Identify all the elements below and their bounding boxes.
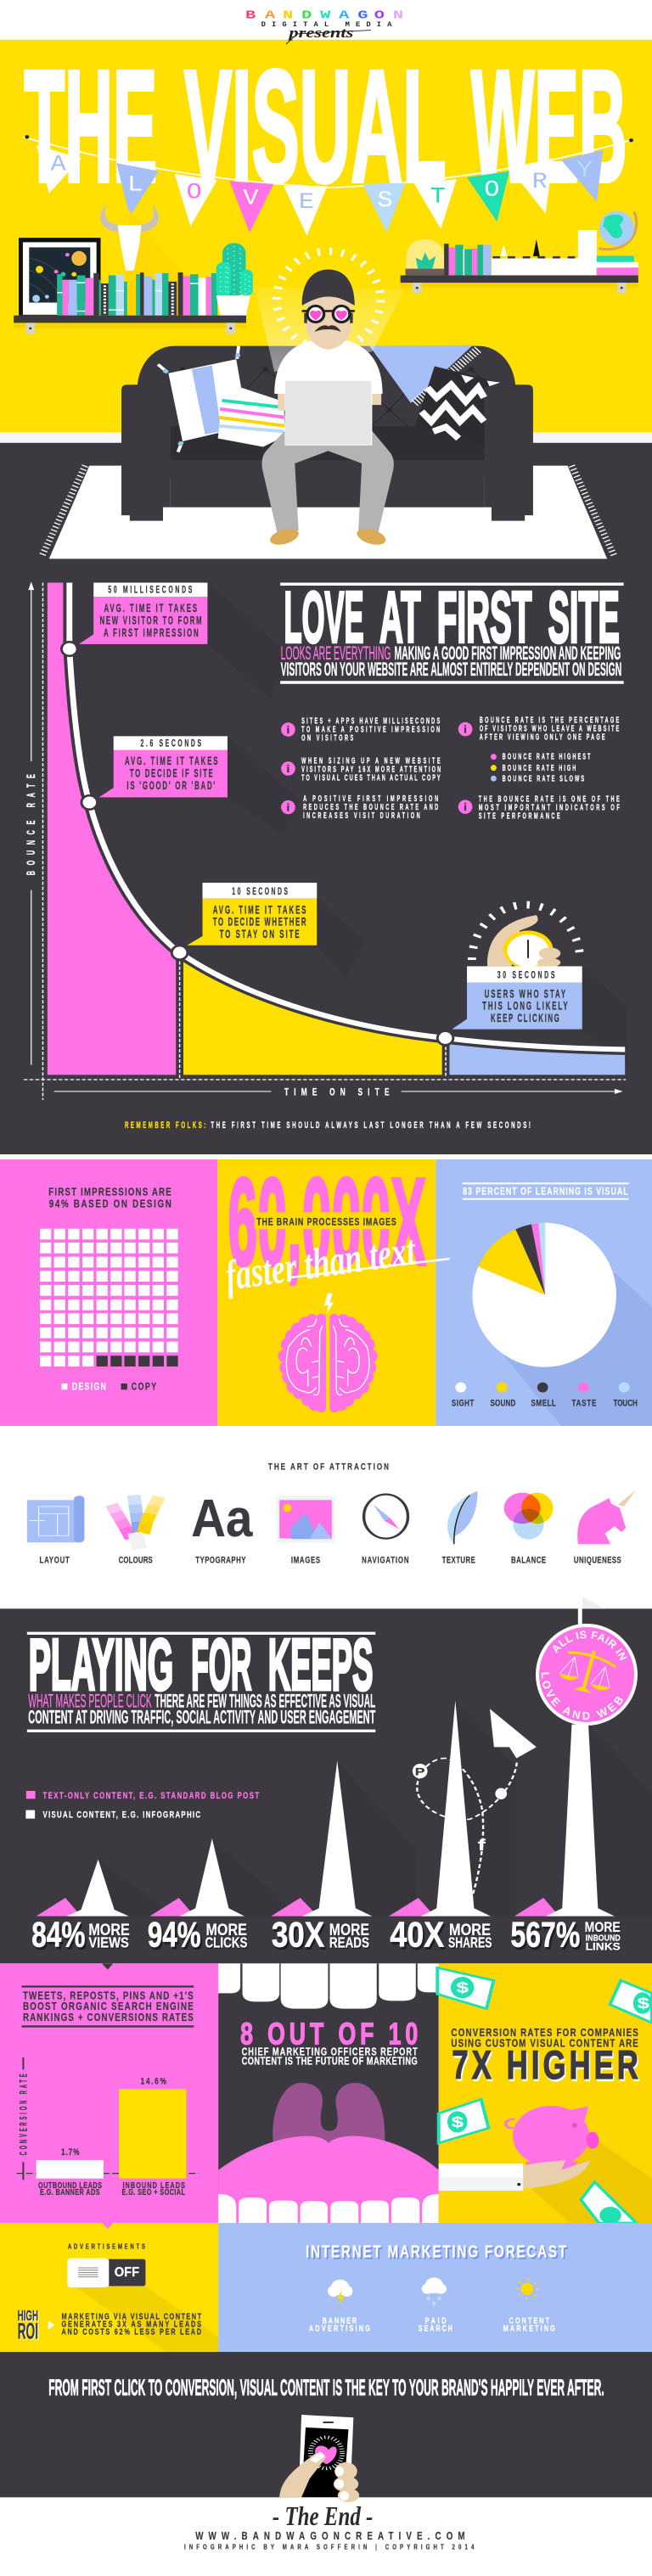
callout: 50 milliseconds: NEW VISITOR TO FORM	[100, 615, 202, 627]
legend: senses: TASTE	[571, 1398, 597, 1409]
heading: playing for keeps: WHAT MAKES PEOPLE CLICK	[28, 1691, 152, 1711]
info icons: i	[287, 724, 289, 736]
bunting: A Love Story: O	[484, 177, 500, 203]
text: info notes: INCREASES VISIT DURATION	[303, 811, 420, 821]
man on sofa	[261, 269, 394, 547]
legend: design vs copy	[61, 1381, 156, 1393]
stat: 30x more reads: READS	[330, 1935, 370, 1952]
icon: balance circles	[504, 1493, 553, 1540]
icon: bolt	[324, 1293, 334, 1313]
legend: senses: SMELL	[531, 1398, 556, 1409]
pie chart	[472, 1223, 616, 1367]
panel: internet marketing forecast: INTERNET MARKETING FORECAST	[306, 2242, 566, 2261]
toggle off: OFF	[115, 2265, 139, 2280]
labels: art of attraction: COLOURS	[119, 1556, 153, 1565]
panel: 7x higher: 7X HIGHER	[453, 2045, 639, 2090]
bar: inbound leads	[119, 2089, 186, 2179]
zigzag pillow	[414, 367, 500, 445]
stat: 30x more reads: READS	[329, 1933, 369, 1950]
badge: all is fair in love and web: ALL IS FAIR IN	[553, 1631, 627, 1661]
footer: the end and credits	[184, 2500, 475, 2551]
stat: 84% more views: MORE	[88, 1921, 130, 1939]
icon: globe	[599, 211, 637, 250]
panel: internet marketing forecast	[218, 2223, 652, 2352]
icon: dollar bills: $	[457, 1979, 469, 1996]
heading: love at first site: AT	[379, 577, 421, 658]
throw and pillows	[158, 345, 500, 452]
callout: 30 seconds: USERS WHO STAY	[485, 988, 565, 1001]
stat: 94% more clicks: 94%	[148, 1916, 201, 1955]
section: closing panels	[0, 2223, 652, 2551]
icon: paper plane	[490, 1709, 537, 1759]
text: high ROI: ROI	[18, 2319, 38, 2344]
callout: 30 seconds: KEEP CLICKING	[491, 1013, 559, 1025]
logo: Bandwagon Digital Media presents: B	[245, 9, 256, 22]
stat: 30x more reads: 30X	[272, 1916, 324, 1955]
icon: brain	[278, 1293, 378, 1412]
labels: art of attraction	[40, 1556, 621, 1565]
panel: 60,000x faster	[217, 1153, 436, 1426]
icon: dollar bills: $	[638, 1995, 649, 2012]
icon: dollar bills	[437, 1967, 652, 2224]
heading: playing for keeps: FOR	[191, 1624, 251, 1705]
legend: content types: TEXT-ONLY CONTENT, E.G. STANDARD BLOG POST	[42, 1791, 259, 1800]
panel: internet marketing forecast: ADVERTISING	[309, 2324, 370, 2333]
legend: bounce rate	[491, 752, 591, 783]
stat: 567% more inbound links: MORE	[586, 1921, 621, 1936]
panel: 7x higher: 7X HIGHER	[452, 2043, 638, 2087]
text: high ROI: HIGH	[18, 2307, 38, 2324]
panel: internet marketing forecast: SEARCH	[419, 2324, 452, 2333]
icon: piggy bank in hand	[439, 2106, 599, 2191]
panel: internet marketing forecast: BANNER	[323, 2316, 357, 2326]
panel: ads off and high ROI: GENERATES 3X AS MANY LEADS	[61, 2319, 201, 2329]
callout: 10 seconds: AVG. TIME IT TAKES	[213, 904, 306, 917]
panel: 7x higher: USING CUSTOM VISUAL CONTENT ARE	[451, 2037, 638, 2050]
footer: the end and credits: - The End -	[273, 2500, 373, 2531]
stat: 94% more clicks: MORE	[206, 1922, 248, 1940]
panel: mouth 8 out of 10: CONTENT IS THE FUTURE OF MARKETING	[242, 2056, 418, 2068]
footer: the end and credits: WWW.BANDWAGONCREATIVE.COM	[195, 2530, 465, 2542]
callout: 50 milliseconds: AVG. TIME IT TAKES	[104, 603, 198, 615]
stat: 40x more shares: 40X	[391, 1918, 446, 1957]
panel: ads off and high ROI: AND COSTS 62% LESS PER LEAD	[61, 2326, 201, 2337]
legend: design vs copy: DESIGN	[72, 1381, 106, 1393]
icon: phone with heart in hand	[279, 2415, 359, 2502]
icon: rain cloud	[422, 2277, 447, 2306]
icon: hand with stopwatch	[472, 905, 580, 968]
text: info notes: TO VISUAL CUES THAN ACTUAL COPY	[301, 773, 441, 783]
icon: scales	[559, 1651, 615, 1693]
legend: bounce rate: BOUNCE RATE SLOWS	[503, 774, 585, 783]
icon: layout blueprint	[27, 1496, 84, 1542]
labels: art of attraction: BALANCE	[511, 1556, 546, 1565]
callout: 30 seconds: THIS LONG LIKELY	[482, 1001, 568, 1013]
panel: mouth 8 out of 10: 8 OUT OF 10	[240, 2016, 418, 2051]
shirt	[274, 340, 383, 446]
callout: 10 seconds: TO DECIDE WHETHER	[213, 917, 306, 929]
bunting: A Love Story	[23, 135, 633, 236]
labels: art of attraction: NAVIGATION	[362, 1556, 409, 1565]
legend: content types: VISUAL CONTENT, E.G. INFOGRAPHIC	[42, 1810, 200, 1820]
panel: internet marketing forecast: CONTENT	[509, 2316, 550, 2326]
books	[57, 272, 217, 316]
bunting: A Love Story: E	[299, 189, 314, 215]
sofa	[121, 346, 533, 521]
labels: art of attraction: TYPOGRAPHY	[195, 1556, 246, 1565]
callout shadows	[207, 583, 628, 1067]
stat: 84% more views: 84%	[33, 1918, 87, 1957]
halo rays	[277, 251, 380, 349]
panel: 7x higher	[437, 1963, 652, 2224]
panel: conversion rate chart: OUTBOUND LEADS	[38, 2180, 102, 2190]
icon: cactus	[216, 243, 253, 316]
labels: art of attraction: LAYOUT	[40, 1556, 70, 1565]
labels: art of attraction: TEXTURE	[442, 1556, 475, 1565]
info icons: i	[464, 801, 467, 813]
callout: 10 seconds: TO STAY ON SITE	[220, 929, 300, 941]
heading: playing for keeps: PLAYING	[29, 1624, 173, 1705]
heading: the art of attraction: THE ART OF ATTRACTION	[268, 1462, 389, 1473]
shelf	[14, 316, 246, 334]
panel: ads off and high ROI	[0, 2223, 218, 2352]
bunting: A Love Story: T	[430, 183, 446, 210]
info icons: i	[287, 801, 289, 813]
heading: playing for keeps	[27, 1624, 375, 1732]
brain right hemisphere	[329, 1314, 378, 1412]
text: info notes: WHEN SIZING UP A NEW WEBSITE	[301, 756, 441, 766]
panel: 83 percent visual learning	[436, 1159, 652, 1426]
text: info notes: ON VISITORS	[301, 733, 354, 743]
legend: senses: SOUND	[490, 1398, 515, 1409]
badge: all is fair in love and web	[536, 1624, 638, 1726]
lower teeth	[218, 2194, 439, 2223]
bunting: A Love Story: Y	[577, 157, 593, 183]
logo: Bandwagon Digital Media presents: DIGITAL MEDIA	[261, 22, 391, 29]
icon: storm cloud	[328, 2280, 352, 2306]
stat: 567% more inbound links: INBOUND	[586, 1933, 621, 1943]
panel: conversion rate chart: E.G. SEO + SOCIAL	[122, 2187, 185, 2197]
toggle off	[67, 2259, 145, 2287]
panel: conversion rate chart: INBOUND LEADS	[122, 2180, 185, 2190]
callout: 10 seconds: 10 SECONDS	[232, 886, 288, 898]
icon: images	[277, 1496, 334, 1542]
callout: 50 milliseconds: A FIRST IMPRESSION	[104, 627, 199, 640]
stat: 40x more shares: MORE	[450, 1922, 492, 1940]
stat: 40x more shares: MORE	[449, 1921, 491, 1939]
legs	[261, 430, 394, 533]
icon: colour swatches	[111, 1496, 160, 1549]
panel: mouth 8 out of 10	[218, 1963, 439, 2223]
stat: 30x more reads: 30X	[273, 1918, 326, 1957]
logo: Bandwagon Digital Media presents: N	[283, 9, 293, 22]
section: playing for keeps: SHARES	[449, 1935, 492, 1952]
section: playing for keeps	[0, 1596, 652, 1963]
laptop glow	[255, 287, 405, 372]
wall	[0, 40, 652, 433]
panel: conversion rate chart	[0, 1963, 218, 2223]
heading: love at first site	[280, 577, 624, 684]
text: info notes: SITES + APPS HAVE MILLISECONDS	[301, 716, 441, 726]
logo: Bandwagon Digital Media presents: D	[301, 9, 312, 22]
axes: BOUNCE RATE	[25, 774, 38, 875]
badge: all is fair in love and web: LOVE AND WEB	[542, 1672, 623, 1720]
stat: 84% more views: MORE	[89, 1922, 131, 1940]
section: conversion panels	[0, 1963, 652, 2224]
legend: senses: TOUCH	[613, 1398, 638, 1409]
section: playing for keeps: KEEPS	[268, 1624, 373, 1705]
labels: art of attraction: UNIQUENESS	[574, 1556, 621, 1565]
panel: ads off and high ROI: ADVERTISEMENTS	[68, 2242, 145, 2251]
legend: senses	[452, 1383, 638, 1409]
bunting: A Love Story: V	[243, 185, 259, 211]
stat: 94% more clicks: CLICKS	[205, 1933, 247, 1950]
icon: texture feather	[447, 1491, 477, 1544]
stat: 94% more clicks: CLICKS	[205, 1935, 248, 1952]
logo: Bandwagon Digital Media presents: presents	[287, 25, 354, 41]
text: high ROI: HIGH	[19, 2308, 39, 2325]
glasses with hearts	[302, 306, 355, 322]
text: info notes: BOUNCE RATE IS THE PERCENTAGE	[480, 716, 620, 725]
dashed flight path: f	[478, 1836, 486, 1854]
callout: 30 seconds	[452, 966, 582, 1030]
tongue	[218, 2136, 439, 2223]
callout: 50 milliseconds	[79, 583, 207, 644]
text: info notes: THE BOUNCE RATE IS ONE OF THE	[479, 794, 620, 804]
stat: 567% more inbound links: LINKS	[587, 1942, 621, 1954]
upper teeth	[218, 1963, 439, 2009]
panel: conversion rate chart: CONVERSION RATE	[18, 2074, 29, 2155]
text: info notes: VISITORS PAY 16X MORE ATTENTION	[301, 765, 441, 774]
callout: 30 seconds: 30 SECONDS	[497, 969, 555, 981]
logo: Bandwagon Digital Media presents	[245, 9, 403, 44]
icon: sun	[517, 2279, 537, 2298]
shoes	[267, 525, 388, 547]
poster	[19, 238, 101, 316]
axes	[24, 581, 626, 1100]
right shelf: terrarium, books, chess, globe	[401, 211, 638, 293]
footnote: remember folks: REMEMBER FOLKS:	[125, 1120, 205, 1131]
rug	[42, 466, 615, 558]
panel: 7x higher: CONVERSION RATES FOR COMPANIES	[451, 2027, 638, 2039]
section: hero illustration	[0, 9, 652, 577]
panel: 94 percent design: FIRST IMPRESSIONS ARE	[48, 1186, 171, 1198]
legend: content types	[25, 1791, 259, 1820]
info icons: i	[464, 723, 467, 735]
icon: navigation compass	[364, 1495, 408, 1539]
callout: 50 milliseconds: 50 MILLISECONDS	[108, 585, 193, 596]
icon: typography Aa: Aa	[191, 1488, 253, 1547]
text: info notes: AFTER VIEWING ONLY ONE PAGE	[480, 732, 605, 742]
text: info notes: SITE PERFORMANCE	[479, 811, 560, 821]
chart: spikes	[37, 1596, 652, 1917]
legend: bounce rate: BOUNCE RATE HIGH	[503, 764, 576, 773]
callout: 2.6 seconds: IS 'GOOD' OR 'BAD'	[126, 780, 215, 793]
stat: 567% more inbound links: MORE	[585, 1920, 621, 1935]
text: info notes	[301, 716, 620, 821]
panel: internet marketing forecast: PAID	[425, 2316, 447, 2326]
stat: 84% more views: 84%	[31, 1916, 85, 1955]
panel: mouth 8 out of 10: CHIEF MARKETING OFFICERS REPORT	[242, 2046, 418, 2058]
section: playing for keeps: SHARES	[448, 1933, 492, 1950]
axes: TIME ON SITE	[284, 1087, 390, 1098]
info icons	[281, 722, 472, 814]
stat: 94% more clicks: MORE	[205, 1921, 247, 1939]
text: high ROI	[18, 2307, 54, 2345]
section: love at first site	[0, 577, 652, 1154]
logo: Bandwagon Digital Media presents: G	[357, 9, 368, 22]
labels: art of attraction: IMAGES	[291, 1556, 320, 1565]
text: info notes: TO MAKE A POSITIVE IMPRESSION	[301, 725, 440, 734]
callout: 2.6 seconds: AVG. TIME IT TAKES	[125, 755, 218, 768]
mustache	[317, 326, 339, 330]
stat: 40x more shares: 40X	[390, 1916, 444, 1955]
logo: Bandwagon Digital Media presents: W	[320, 9, 331, 22]
legend: design vs copy: COPY	[132, 1381, 156, 1393]
stat: 567% more inbound links: 567%	[512, 1918, 582, 1957]
footnote: remember folks: THE FIRST TIME SHOULD ALWAYS LAST LONGER THAN A FEW SECONDS!	[211, 1120, 531, 1131]
brain left hemisphere	[278, 1314, 326, 1412]
callout: 2.6 seconds: 2.6 SECONDS	[141, 738, 201, 749]
laptop	[285, 381, 371, 445]
head	[306, 295, 351, 350]
text: info notes: MOST IMPORTANT INDICATORS OF	[479, 803, 620, 812]
callout: 2.6 seconds	[99, 736, 228, 797]
panel: 94 percent design	[0, 1159, 217, 1426]
panel: conversion rate chart: 1.7%	[61, 2147, 80, 2158]
waffle chart	[40, 1229, 178, 1367]
panel: conversion rate chart: TWEETS, REPOSTS, PINS AND +1'S	[23, 1990, 194, 2002]
bunting: A Love Story: R	[532, 169, 548, 195]
logo: Bandwagon Digital Media presents: N	[393, 9, 403, 22]
logo: Bandwagon Digital Media presents: O	[374, 9, 385, 22]
stat: 84% more views: VIEWS	[88, 1933, 129, 1950]
legend: bounce rate: BOUNCE RATE HIGHEST	[503, 752, 591, 761]
heading: love at first site: LOOKS ARE EVERYTHING	[281, 643, 391, 665]
stat: 84% more views: VIEWS	[89, 1935, 130, 1952]
callout: 10 seconds	[187, 883, 317, 946]
text: info notes: OF VISITORS WHO LEAVE A WEBSITE	[480, 724, 620, 733]
panel: 94 percent design: 94% BASED ON DESIGN	[49, 1198, 171, 1210]
panel: conversion rate chart: RANKINGS + CONVERSIONS RATES	[23, 2012, 194, 2023]
stat: 30x more reads: MORE	[330, 1922, 370, 1940]
heading: love at first site: LOVE	[284, 577, 364, 658]
icon: bull skull	[100, 205, 159, 271]
text: info notes: A POSITIVE FIRST IMPRESSION	[303, 794, 438, 804]
stat: 94% more clicks: 94%	[149, 1918, 203, 1957]
icon: unicorn	[577, 1490, 636, 1544]
blue stripe pillow	[158, 346, 241, 452]
tufting	[168, 368, 486, 426]
panel: 83 percent visual learning: 83 PERCENT OF LEARNING IS VISUAL	[463, 1186, 628, 1198]
striped pillow	[218, 388, 285, 447]
footer: the end and credits: INFOGRAPHIC BY MARA SOFFERIN | COPYRIGHT 2014	[184, 2542, 475, 2551]
arms	[278, 390, 381, 411]
bar: outbound leads	[37, 2160, 104, 2179]
bunting: A Love Story: L	[127, 171, 143, 198]
legend: senses: SIGHT	[452, 1398, 474, 1409]
logo: Bandwagon Digital Media presents: A	[265, 9, 275, 22]
callout: 2.6 seconds: TO DECIDE IF SITE	[130, 767, 213, 780]
text: info notes: REDUCES THE BOUNCE RATE AND	[303, 802, 438, 812]
bunting: A Love Story: A	[50, 151, 67, 177]
panel: conversion rate chart: E.G. BANNER ADS	[40, 2187, 100, 2197]
dashed flight path: P	[415, 1766, 425, 1778]
section: stats panels and art of attraction	[0, 1153, 652, 1565]
throat	[273, 2083, 385, 2145]
title: The Visual Web: THE	[24, 38, 157, 216]
panel: closing statement	[0, 2352, 652, 2497]
stat: 30x more reads: MORE	[329, 1921, 369, 1939]
panel: 60,000x faster: THE BRAIN PROCESSES IMAGES	[256, 1216, 396, 1228]
panel: internet marketing forecast: INTERNET MARKETING FORECAST	[307, 2243, 568, 2263]
panel: conversion rate chart: BOOST ORGANIC SEARCH ENGINE	[23, 2001, 194, 2012]
stat: 567% more inbound links: 567%	[510, 1916, 580, 1955]
text: high ROI: ROI	[19, 2320, 39, 2345]
left shelf: poster, skull, books and cactus	[14, 205, 253, 334]
text: faster than text script: faster than text	[222, 1226, 419, 1299]
panel: conversion rate chart: 14.6%	[141, 2077, 166, 2087]
dashed flight path	[413, 1759, 517, 1904]
logo: Bandwagon Digital Media presents: A	[339, 9, 350, 22]
panel: ads off and high ROI: MARKETING VIA VISUAL CONTENT	[61, 2311, 202, 2321]
icon: dollar bills: $	[452, 2113, 464, 2130]
info icons: i	[287, 763, 289, 775]
panel: internet marketing forecast: MARKETING	[503, 2324, 555, 2333]
bunting: A Love Story: S	[377, 187, 393, 213]
chart: bounce rate curve	[48, 583, 625, 1080]
stat: 567% more inbound links: LINKS	[586, 1941, 621, 1952]
bunting: A Love Story: O	[187, 179, 202, 205]
